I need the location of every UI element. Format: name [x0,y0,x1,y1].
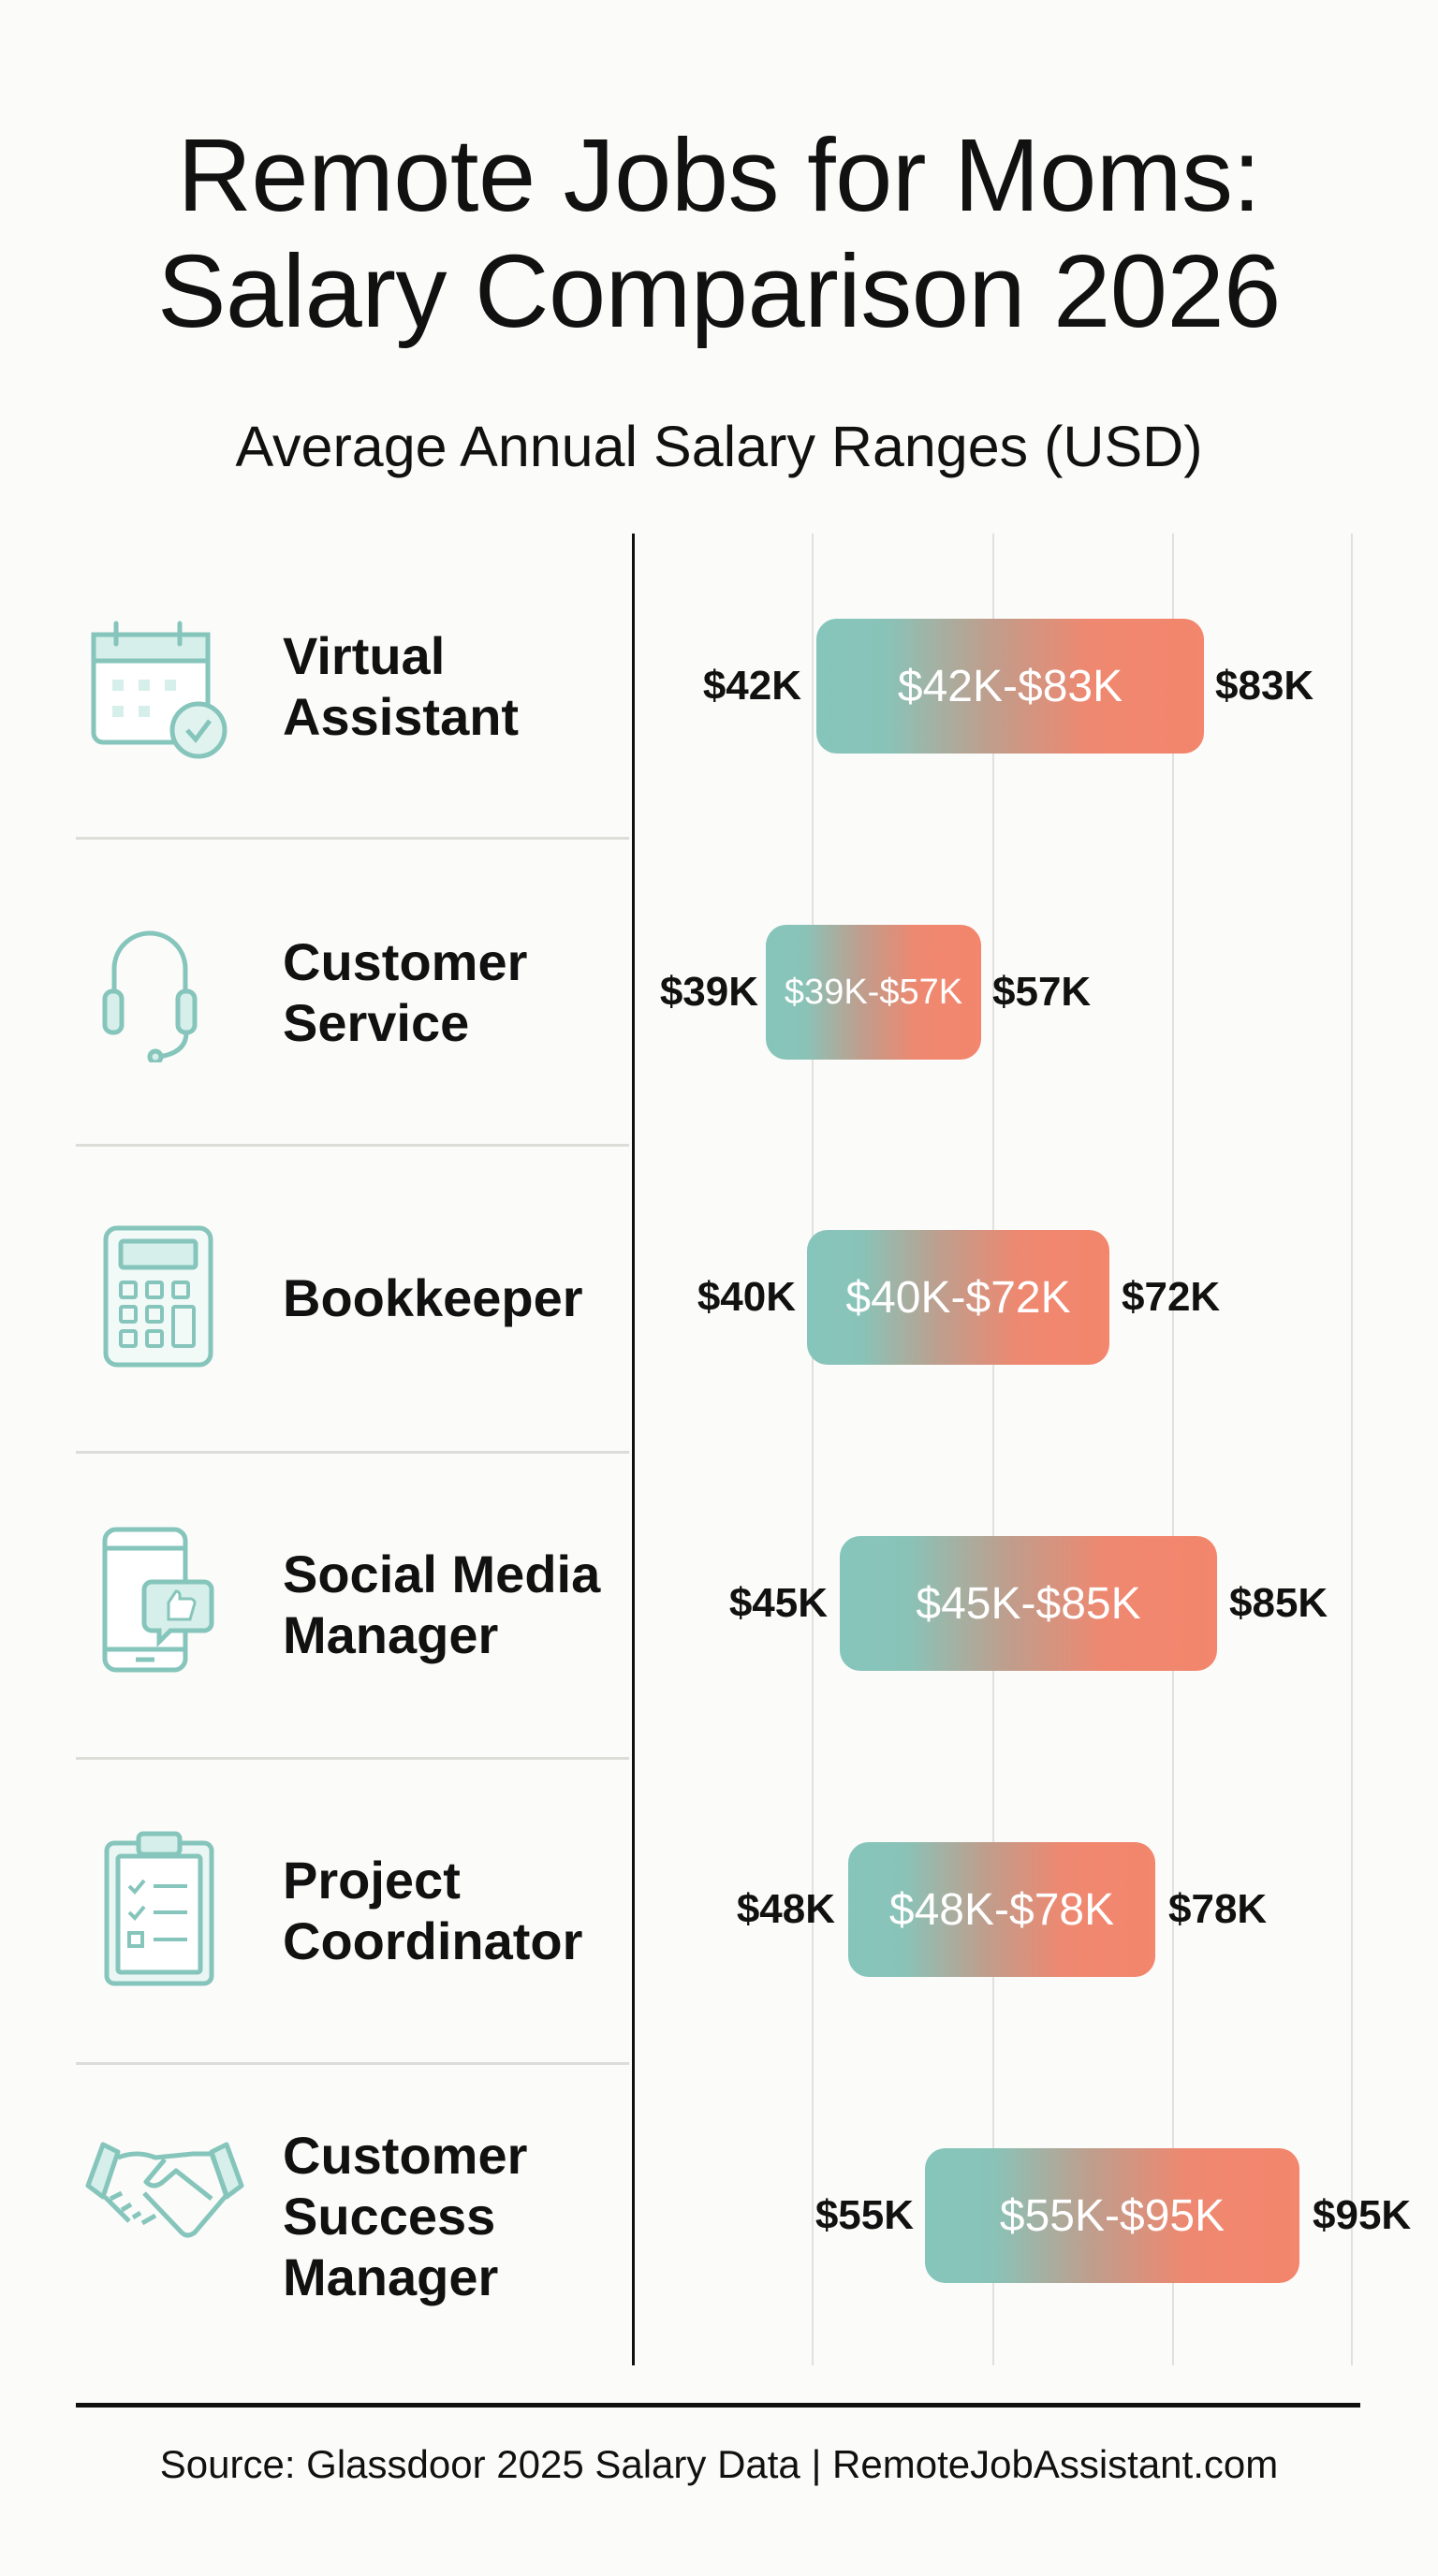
bar: virtual assistant: $42K-$83K [898,661,1123,711]
label: bookkeeper: Bookkeeper [283,1268,583,1327]
title [157,118,1281,349]
label: project coordinator: Project [283,1851,461,1910]
label: social media manager [283,1544,601,1664]
bar: project coordinator [737,1842,1267,1977]
bar: virtual assistant: $42K [703,663,801,709]
bar: virtual assistant [703,619,1313,754]
label: customer service: Customer [283,932,527,991]
label: virtual assistant [283,626,519,746]
bar: project coordinator: $48K-$78K [889,1885,1114,1934]
label: project coordinator [283,1851,582,1970]
chart [76,534,1353,2365]
label: customer success manager [283,2126,527,2306]
bar: project coordinator: $78K [1168,1886,1267,1932]
icon: calculator [103,1226,213,1367]
title: Salary Comparison 2026 [157,234,1281,349]
row: virtual assistant [92,622,227,758]
icon: phone with like [103,1528,213,1672]
label: customer success manager: Manager [283,2247,498,2306]
bar: project coordinator: $48K [737,1886,835,1932]
bar: bookkeeper: $40K-$72K [845,1273,1071,1322]
bar: customer service: $57K [992,969,1091,1015]
title: Remote Jobs for Moms: [177,118,1261,233]
label: social media manager: Manager [283,1605,498,1664]
bar: customer service: $39K [660,969,758,1015]
label: customer service: Service [283,993,469,1052]
label: customer success manager: Customer [283,2126,527,2185]
source text: Source: Glassdoor 2025 Salary Data | RemoteJobAssistant.com [160,2442,1278,2486]
icon: handshake [86,2142,243,2238]
label: social media manager: Social Media [283,1544,600,1603]
footer divider [76,2403,1360,2408]
bar: social media manager: $45K-$85K [916,1578,1141,1629]
bar: bookkeeper: $72K [1122,1274,1220,1320]
bar: customer success manager: $55K-$95K [1000,2190,1225,2241]
bar: bookkeeper [697,1230,1220,1365]
bar: social media manager: $85K [1229,1580,1328,1626]
label: project coordinator: Coordinator [283,1911,582,1970]
label: customer service [283,932,527,1052]
label: virtual assistant: Virtual [283,626,445,685]
label: virtual assistant: Assistant [283,687,519,746]
bar: customer success manager: $55K [815,2192,914,2238]
bar: social media manager [729,1536,1328,1671]
bar: virtual assistant: $83K [1215,663,1313,709]
icon: clipboard [105,1831,213,1986]
icon: headset [103,930,197,1062]
bar: social media manager: $45K [729,1580,828,1626]
bar: customer success manager [815,2148,1411,2283]
icon: calendar [92,622,227,758]
bar: customer service [660,925,1091,1060]
subtitle: Average Annual Salary Ranges (USD) [235,415,1203,478]
bar: customer success manager: $95K [1313,2192,1411,2238]
bar: customer service: $39K-$57K [785,972,962,1011]
bar: bookkeeper: $40K [697,1274,796,1320]
label: customer success manager: Success [283,2187,495,2246]
